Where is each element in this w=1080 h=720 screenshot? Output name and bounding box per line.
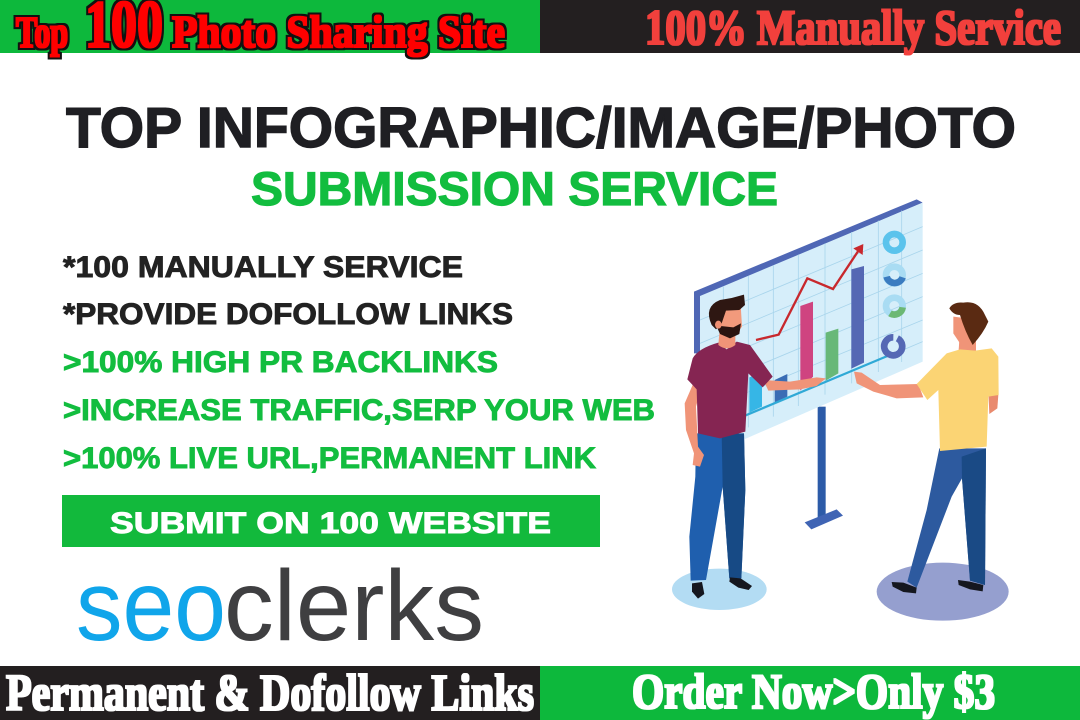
board panel <box>694 199 923 439</box>
feature list <box>63 251 655 475</box>
feature list: >100% HIGH PR BACKLINKS <box>63 346 498 379</box>
top banner left: Top 100 Photo Sharing Site: Top <box>16 8 68 57</box>
bar chart <box>746 266 889 416</box>
seoclerks logo: clerks <box>224 550 484 662</box>
man in maroon shirt <box>685 295 826 599</box>
board stand <box>805 407 843 529</box>
feature list: >100% LIVE URL,PERMANENT LINK <box>63 442 596 475</box>
subtitle: SUBMISSION SERVICE <box>251 162 778 215</box>
bottom banner right: Order Now>Only $3: Order Now>Only $3 <box>632 663 995 719</box>
illustration: two men presenting a chart board <box>672 199 1009 621</box>
seoclerks logo <box>76 550 484 662</box>
feature list: *PROVIDE DOFOLLOW LINKS <box>63 298 513 331</box>
top banner left: Top 100 Photo Sharing Site <box>0 0 540 62</box>
main title: TOP INFOGRAPHIC/IMAGE/PHOTO <box>66 96 1016 160</box>
man in yellow shirt <box>854 302 999 593</box>
feature list: >INCREASE TRAFFIC,SERP YOUR WEB <box>63 394 655 427</box>
donut icons <box>884 234 903 355</box>
feature list: *100 MANUALLY SERVICE <box>63 251 463 284</box>
floor shadows <box>672 563 1009 621</box>
trend arrow <box>756 244 863 340</box>
green call-to-action bar: SUBMIT ON 100 WEBSITE <box>110 507 551 540</box>
green call-to-action bar <box>62 495 600 547</box>
seoclerks logo: seo <box>76 550 226 662</box>
top banner left: Top 100 Photo Sharing Site: Photo Sharing Site <box>172 6 505 57</box>
